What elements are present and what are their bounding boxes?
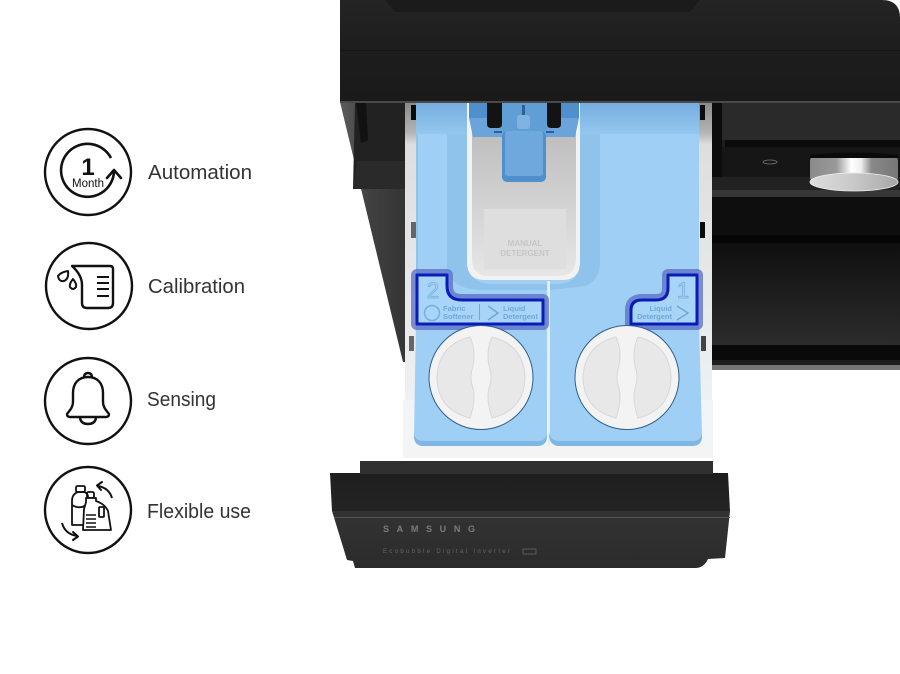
- label: Automation: Automation: [148, 162, 252, 184]
- label: Flexible use: Flexible use: [147, 501, 251, 523]
- blue slider clip: [469, 103, 579, 182]
- label: Sensing: Sensing: [147, 389, 216, 411]
- manual detergent cup: [467, 103, 580, 280]
- top lip: [360, 461, 713, 475]
- label 2 highlight: fabric softener and liquid detergent: 2: [427, 278, 439, 303]
- drawer front: [330, 461, 730, 568]
- label 2 highlight: fabric softener and liquid detergent: Softener: [443, 312, 474, 321]
- feature: automation: [45, 129, 252, 215]
- front upper face: [330, 473, 730, 511]
- label 2 highlight: fabric softener and liquid detergent: [417, 275, 543, 324]
- label: Calibration: Calibration: [148, 276, 245, 298]
- dial knob: [810, 152, 898, 191]
- highlight line: [334, 517, 730, 518]
- front lower face: [332, 511, 730, 568]
- capacity badge: [523, 549, 536, 554]
- brand text: SAMSUNG: [383, 524, 475, 534]
- label 1 highlight: liquid detergent: [631, 275, 697, 324]
- icon: detergent bottles: [45, 467, 131, 553]
- icon: measuring jug: [46, 243, 132, 329]
- feature list: [45, 129, 252, 553]
- icon: one month cycle: Month: [72, 178, 104, 190]
- embossed cup text: MANUAL: [508, 239, 542, 248]
- icon: one month cycle: 1: [81, 154, 95, 181]
- power indicator: [763, 160, 777, 164]
- feature: flexible use: [45, 467, 251, 553]
- dispenser drawer tray: [403, 103, 713, 458]
- icon: bell: [45, 358, 131, 444]
- feature: sensing: [45, 358, 216, 444]
- right dispenser cap: [575, 326, 679, 430]
- machine top panel: [340, 0, 900, 103]
- label 2 highlight: fabric softener and liquid detergent: Fabric: [443, 304, 466, 313]
- machine left side panel: [340, 102, 405, 362]
- label 2 highlight: fabric softener and liquid detergent: Detergent: [503, 312, 539, 321]
- machine right side with door: [711, 102, 900, 370]
- label 2 highlight: fabric softener and liquid detergent: Liquid: [503, 304, 526, 313]
- white tray: [403, 103, 713, 458]
- label 1 highlight: liquid detergent: Liquid: [650, 304, 672, 313]
- washing machine body: [340, 0, 900, 370]
- icon: one month cycle: [45, 129, 131, 215]
- blue compartment cover: [414, 103, 702, 446]
- feature: calibration: [46, 243, 245, 329]
- manual detergent cup: DETERGENT: [500, 249, 550, 258]
- label 1 highlight: liquid detergent: 1: [677, 278, 689, 303]
- left dispenser cap: [429, 326, 533, 430]
- product text: Ecobubble Digital Inverter: [383, 549, 510, 555]
- label 1 highlight: liquid detergent: Detergent: [637, 312, 672, 321]
